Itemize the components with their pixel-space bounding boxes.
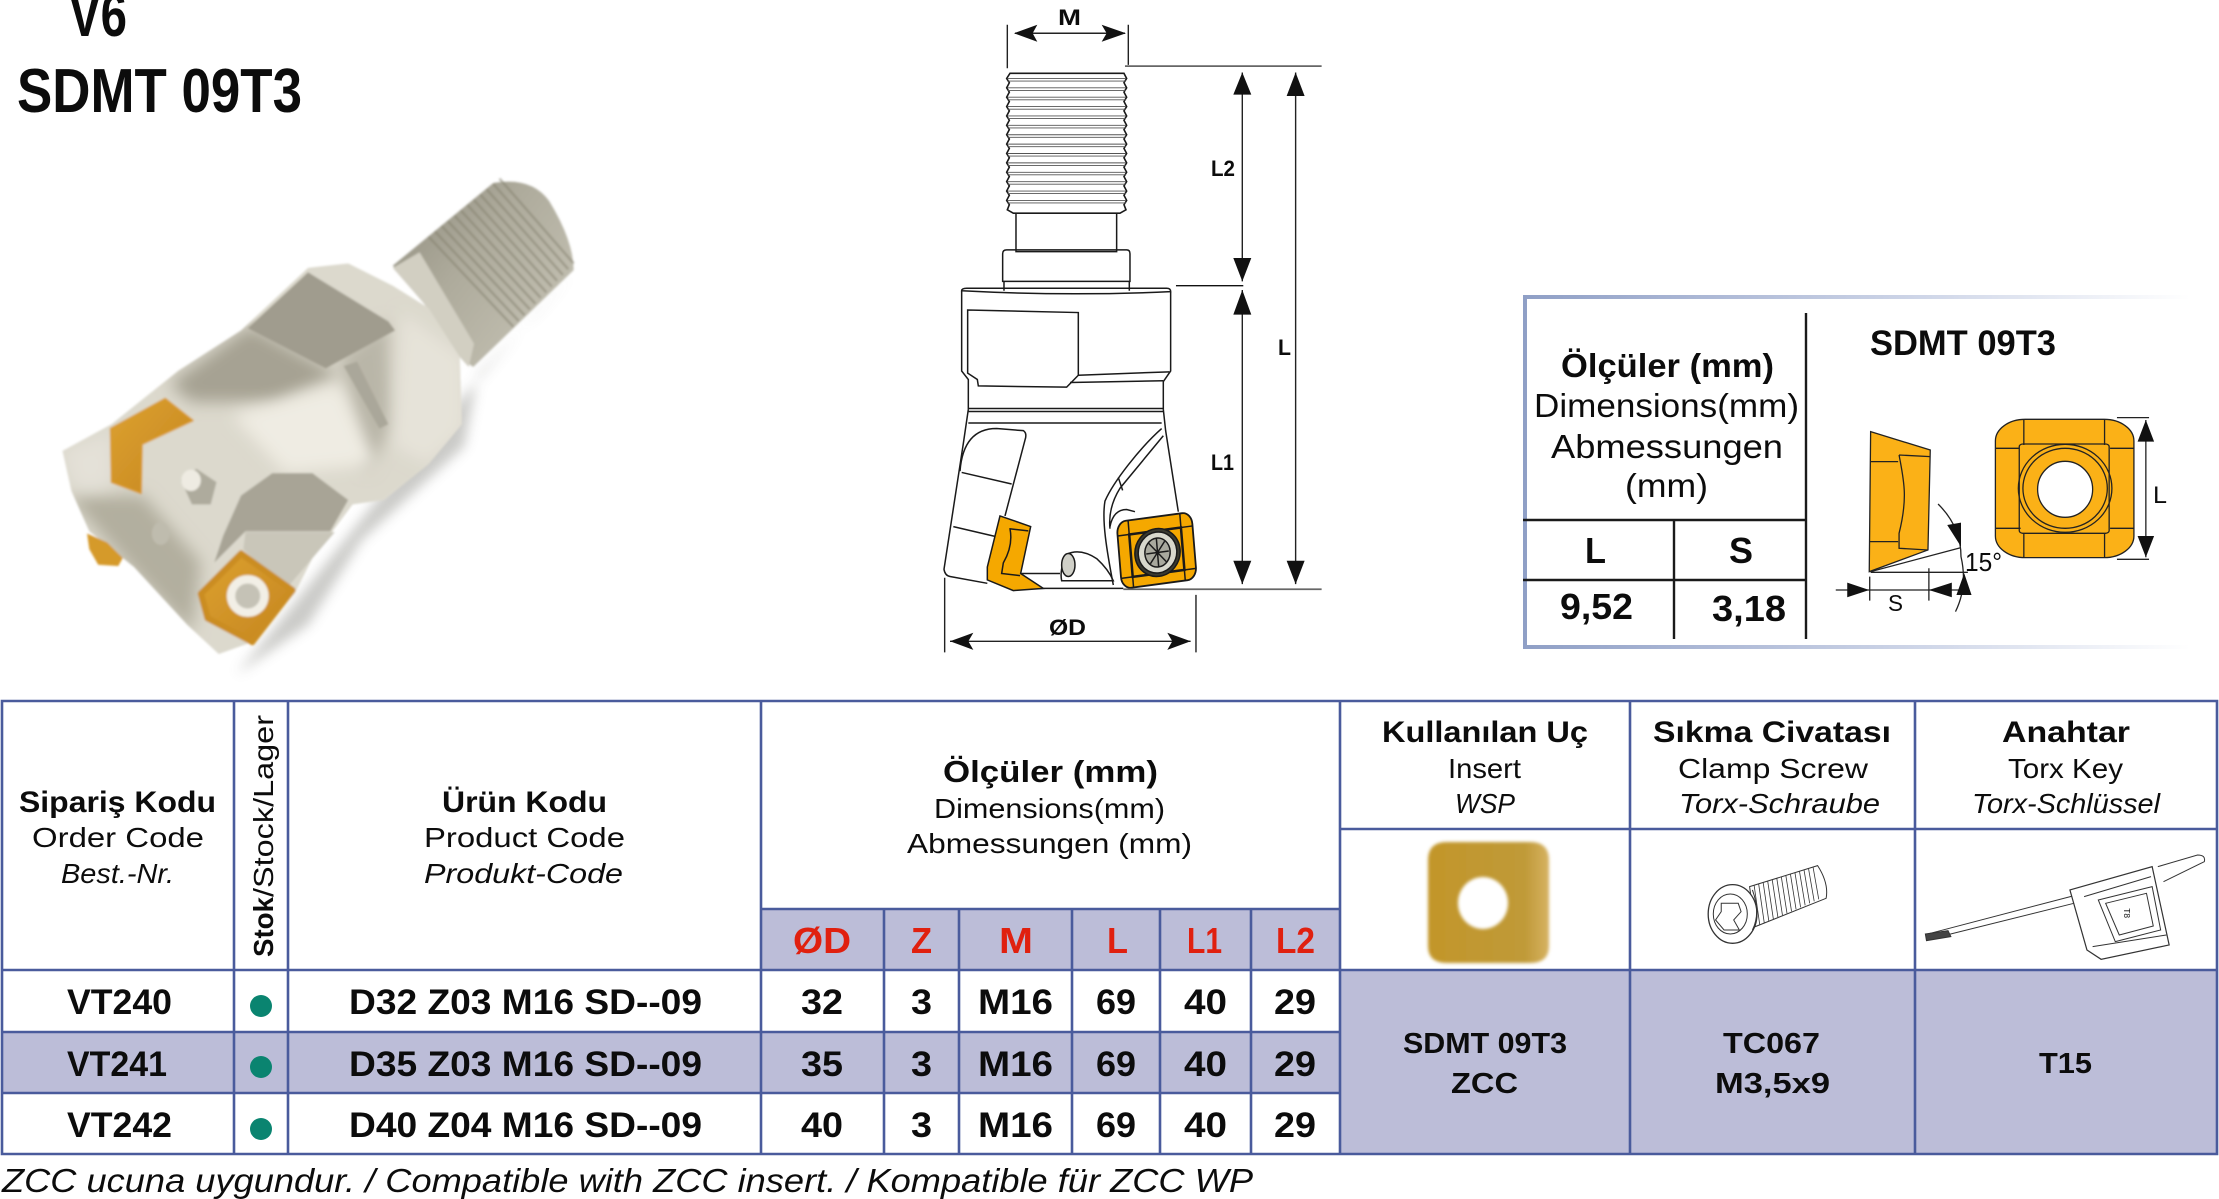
dimension marks	[1836, 418, 2154, 612]
table shaded cells	[1, 909, 2217, 1154]
dimension column labels: L2	[1276, 920, 1315, 961]
arrow: L	[1287, 72, 1305, 584]
dimension column labels	[793, 920, 1315, 961]
column header: dimensions: Dimensions(mm)	[934, 793, 1165, 824]
insert screw	[227, 575, 269, 617]
cutter outline	[944, 73, 1197, 591]
icon: clamp screw	[1708, 866, 1827, 943]
table: product data	[1, 701, 2217, 1154]
dimension label: L1: L1	[1211, 450, 1234, 475]
row: VT241: D35 Z03 M16 SD--09	[349, 1045, 702, 1084]
drawing: insert views	[1836, 418, 2154, 612]
column header: insert	[1382, 716, 1588, 819]
column heading: L: L	[1585, 530, 1606, 571]
column header: dimensions: Ölçüler (mm)	[943, 754, 1158, 789]
column header: order code: Order Code	[32, 822, 204, 853]
row: VT242: 29	[1274, 1106, 1316, 1145]
row: VT242	[67, 1106, 1316, 1145]
fixing screw	[181, 469, 217, 504]
merged cell: screw code: TC067	[1723, 1028, 1820, 1060]
row: VT241: 69	[1096, 1045, 1136, 1084]
thread	[1007, 73, 1127, 213]
row: VT242: 69	[1096, 1106, 1136, 1145]
right insert	[1116, 512, 1197, 589]
row: VT242: 40	[801, 1106, 843, 1145]
body	[62, 262, 462, 654]
column header: clamp screw	[1653, 716, 1891, 819]
column header: insert: Insert	[1448, 753, 1521, 784]
column header: product code: Product Code	[424, 822, 625, 853]
wrench flat	[248, 272, 395, 368]
text: (mm): (mm)	[1625, 467, 1708, 504]
row: VT242: 40	[1184, 1106, 1227, 1145]
row: VT241: M16	[978, 1045, 1053, 1084]
dimension label: M: M	[1058, 5, 1081, 30]
row: VT241: 3	[911, 1045, 932, 1084]
label: 15 degrees: 15°	[1965, 547, 2002, 577]
icon: gold insert	[1428, 842, 1549, 963]
column header: dimensions	[907, 754, 1192, 859]
photo: milling cutter	[45, 179, 576, 674]
column header: clamp screw: Clamp Screw	[1678, 753, 1869, 784]
column header: insert: WSP	[1455, 788, 1515, 819]
row: VT240	[67, 983, 1316, 1022]
icon: torx key: T8	[2122, 908, 2132, 918]
arrow: M	[1014, 25, 1126, 42]
panel: insert dimensions	[1523, 297, 2190, 647]
value: S: 3,18	[1712, 588, 1786, 629]
row: VT240: 3	[911, 983, 932, 1022]
column header: torx key: Torx-Schlüssel	[1972, 788, 2161, 819]
row: VT241: 35	[801, 1045, 843, 1084]
row: VT242: M16	[978, 1106, 1053, 1145]
column header: insert: Kullanılan Uç	[1382, 716, 1588, 749]
column header: clamp screw: Sıkma Civatası	[1653, 716, 1891, 749]
merged cell: insert code: ZCC	[1451, 1068, 1518, 1100]
merged cell: screw code: M3,5x9	[1715, 1068, 1830, 1100]
column heading: S: S	[1729, 530, 1753, 571]
row: VT241	[67, 1045, 1316, 1084]
column header: order code	[19, 786, 216, 889]
column header: dimensions: Abmessungen (mm)	[907, 828, 1192, 859]
row: VT241: VT241	[67, 1045, 167, 1084]
left insert	[987, 516, 1043, 591]
stock dot	[250, 1056, 272, 1078]
arrow: D	[950, 633, 1191, 650]
row: VT241: 40	[1184, 1045, 1227, 1084]
column header: order code: Best.-Nr.	[61, 858, 174, 889]
dimension column labels: L1	[1187, 920, 1222, 961]
column header: torx key	[1972, 716, 2161, 819]
column header: product code	[424, 786, 625, 889]
front gold insert	[201, 554, 292, 642]
stock dot	[250, 1118, 272, 1140]
row: VT241: 29	[1274, 1045, 1316, 1084]
dimension label: L: L	[1278, 335, 1291, 360]
column header: product code: Ürün Kodu	[442, 786, 607, 819]
table grid	[2, 701, 2217, 1154]
column header: clamp screw: Torx-Schraube	[1679, 788, 1880, 819]
icon: torx key	[1925, 855, 2205, 959]
threaded shaft	[393, 179, 574, 367]
dimension column labels: L	[1107, 920, 1128, 961]
footnote: ZCC ucuna uygundur. / Compatible with ZCC insert. / Kompatible für ZCC WP	[1, 1162, 1253, 1199]
heading: insert name: SDMT 09T3	[1870, 324, 2056, 363]
insert side view	[1869, 432, 1930, 572]
stock dot	[250, 995, 272, 1017]
merged cell: screw code	[1715, 1028, 1830, 1100]
merged cell: key code: T15	[2039, 1048, 2092, 1080]
dimension column labels: Z	[911, 920, 932, 961]
arrow: L2	[1233, 72, 1251, 281]
lower left gold insert	[87, 533, 123, 566]
label: S: S	[1888, 590, 1903, 616]
dimension column labels: ØD	[793, 920, 851, 961]
row: VT240: 69	[1096, 983, 1136, 1022]
row: VT242: D40 Z04 M16 SD--09	[349, 1106, 702, 1145]
title: V6 SDMT 09T3	[17, 0, 302, 126]
row: VT240: 40	[1184, 983, 1227, 1022]
column header: stock: Stok/Stock/Lager	[248, 715, 279, 957]
row: VT240: M16	[978, 983, 1053, 1022]
heading: Ölçüler: Ölçüler (mm)	[1561, 347, 1774, 384]
insert front view	[1995, 419, 2134, 558]
column header: torx key: Anahtar	[2002, 716, 2130, 749]
label: L: L	[2153, 482, 2167, 509]
dimension label: diameter D: ØD	[1049, 615, 1086, 640]
row: VT240: VT240	[67, 983, 172, 1022]
row: VT240: 32	[801, 983, 843, 1022]
merged cell: insert code: SDMT 09T3	[1403, 1028, 1567, 1060]
dimension label: L2: L2	[1211, 156, 1235, 181]
row: VT240: 29	[1274, 983, 1316, 1022]
row: VT242: 3	[911, 1106, 932, 1145]
column header: product code: Produkt-Code	[424, 858, 623, 889]
heading: SDMT 09T3: SDMT 09T3	[17, 57, 302, 126]
dimension column labels: M	[999, 920, 1033, 961]
coolant pocket	[214, 473, 348, 562]
column header: torx key: Torx Key	[2008, 753, 2123, 784]
upper gold insert	[111, 399, 193, 493]
merged cell: insert code	[1403, 1028, 1567, 1100]
arrow: L1	[1233, 290, 1251, 584]
row: VT242: VT242	[67, 1106, 172, 1145]
panel frame	[1525, 297, 2190, 647]
technical drawing: cutter with dimensions	[944, 5, 1322, 652]
text: Abmessungen: Abmessungen	[1551, 428, 1783, 465]
value: L: 9,52	[1560, 586, 1633, 627]
dimension lines	[945, 25, 1322, 652]
text: Dimensions: Dimensions(mm)	[1534, 387, 1799, 424]
column header: order code: Sipariş Kodu	[19, 786, 216, 819]
row: VT240: D32 Z03 M16 SD--09	[349, 983, 702, 1022]
